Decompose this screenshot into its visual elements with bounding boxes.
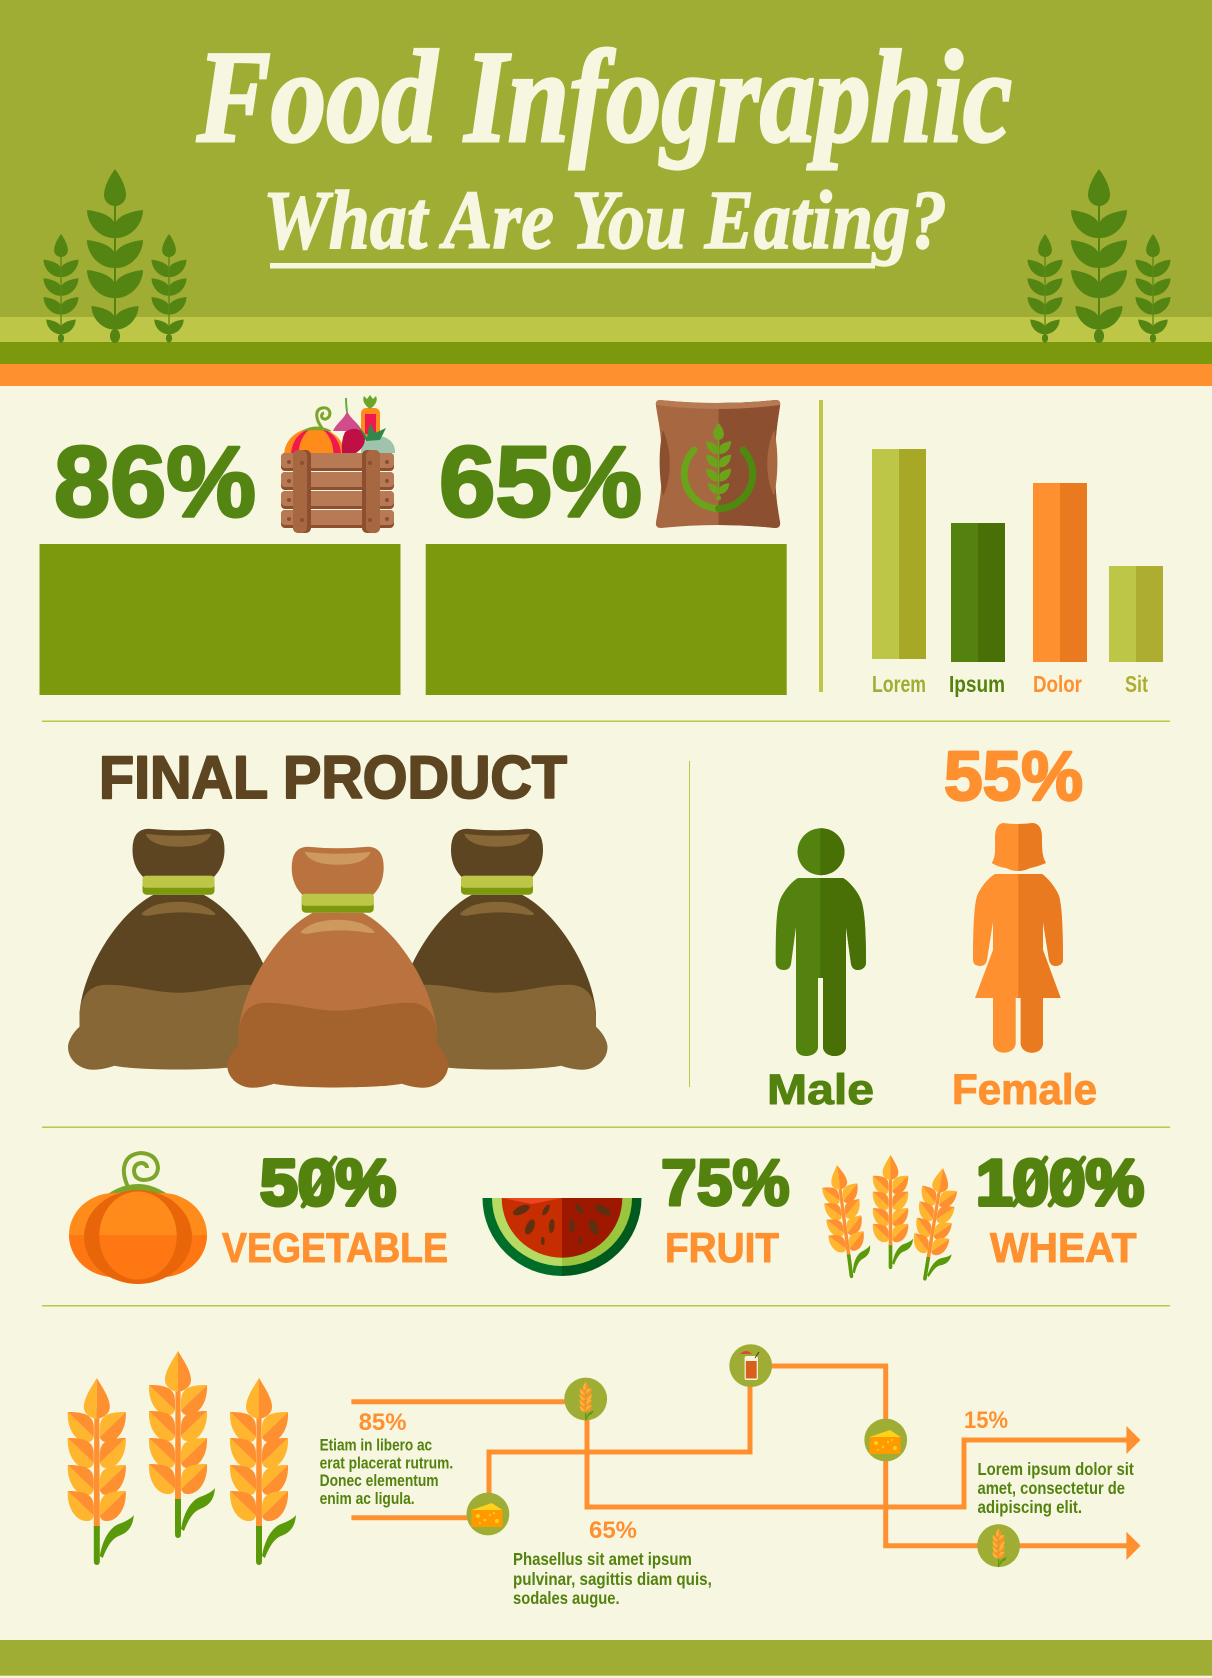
text block: 85% — [320, 1409, 453, 1508]
icon: female figure — [973, 823, 1063, 1053]
text block: 85%: 85% — [359, 1409, 407, 1436]
label: vegetable: VEGETABLE — [222, 1224, 448, 1271]
icon: wheat node lower — [977, 1524, 1020, 1567]
bar: Sit: Sit — [1125, 671, 1148, 697]
icon: cheese node left — [466, 1493, 509, 1535]
icon: watermelon — [482, 1198, 642, 1276]
header banner — [0, 0, 1212, 386]
subtitle: What Are You Eating? — [263, 174, 947, 267]
icon: wheat node — [564, 1378, 607, 1421]
stat: vegetable — [69, 1146, 448, 1284]
icon: cheese node right — [864, 1419, 907, 1461]
stat: 86% vegetables — [40, 395, 400, 695]
vertical divider — [819, 400, 823, 692]
icon: three wheat stalks — [819, 1155, 965, 1284]
text block: 65% — [513, 1517, 712, 1608]
text block: 15%: amet, consectetur de — [978, 1478, 1125, 1498]
text block: 85%: enim ac ligula. — [320, 1490, 415, 1508]
icon: wheat sack — [656, 400, 780, 528]
icon: left sack — [68, 829, 289, 1070]
bar: Dolor — [1033, 483, 1087, 697]
text: 50%: 50% — [260, 1146, 396, 1219]
stat: 55%: 55% — [944, 737, 1083, 815]
arrow: upper — [1126, 1426, 1140, 1454]
text: 100%: 100% — [976, 1146, 1144, 1219]
text: 75%: 75% — [661, 1146, 790, 1219]
panel: green block two — [426, 544, 787, 695]
text block: 65%: sodales augue. — [513, 1588, 620, 1608]
bar: Ipsum: Ipsum — [949, 671, 1005, 697]
text block: 15%: adipiscing elit. — [978, 1497, 1082, 1517]
panel: green block one — [40, 544, 400, 695]
label: male: Male — [767, 1066, 874, 1114]
text block: 85%: Donec elementum — [320, 1472, 439, 1490]
bar: Lorem: Lorem — [872, 671, 926, 697]
bar: Ipsum — [949, 523, 1005, 697]
stat: wheat — [819, 1146, 1144, 1284]
label: wheat: WHEAT — [990, 1224, 1137, 1271]
icon: vegetable crate — [281, 395, 395, 533]
icon: juice node — [729, 1344, 772, 1387]
bar: Sit — [1109, 566, 1163, 697]
text block: 15% — [964, 1407, 1134, 1517]
stat: fruit — [482, 1146, 790, 1276]
stat: 65% wheat — [426, 400, 787, 695]
bar: Dolor: Dolor — [1033, 671, 1082, 697]
arrow: lower — [1126, 1532, 1140, 1560]
text block: 65%: 65% — [589, 1517, 637, 1544]
text block: 15%: Lorem ipsum dolor sit — [978, 1459, 1134, 1479]
bar: Lorem — [872, 449, 926, 697]
icon: male figure — [776, 828, 866, 1056]
icon: large wheat stalks — [68, 1351, 296, 1565]
bar chart — [872, 449, 1163, 697]
icon: right wheat plants — [1028, 169, 1170, 343]
label: fruit: FRUIT — [665, 1224, 779, 1271]
title: Food Infographic — [196, 23, 1012, 170]
icon: right sack — [386, 829, 608, 1070]
icon: pumpkin — [69, 1153, 207, 1284]
text block: 85%: erat placerat rutrum. — [320, 1455, 453, 1473]
flow chart lines — [351, 1366, 1128, 1546]
subtitle underline — [270, 263, 875, 268]
text block: 65%: pulvinar, sagittis diam quis, — [513, 1569, 712, 1589]
heading: final product: FINAL PRODUCT — [99, 744, 567, 811]
text block: 15%: 15% — [964, 1407, 1008, 1434]
stat: 86% vegetables: 86% — [54, 426, 256, 538]
stat: 65% wheat: 65% — [439, 426, 642, 538]
illustration: grain sacks — [68, 829, 608, 1088]
icon: left wheat plants — [44, 169, 186, 343]
icon: centre sack — [227, 847, 448, 1088]
text block: 85%: Etiam in libero ac — [320, 1437, 432, 1455]
label: female: Female — [952, 1066, 1097, 1114]
footer band — [0, 1640, 1212, 1676]
text block: 65%: Phasellus sit amet ipsum — [513, 1549, 692, 1569]
